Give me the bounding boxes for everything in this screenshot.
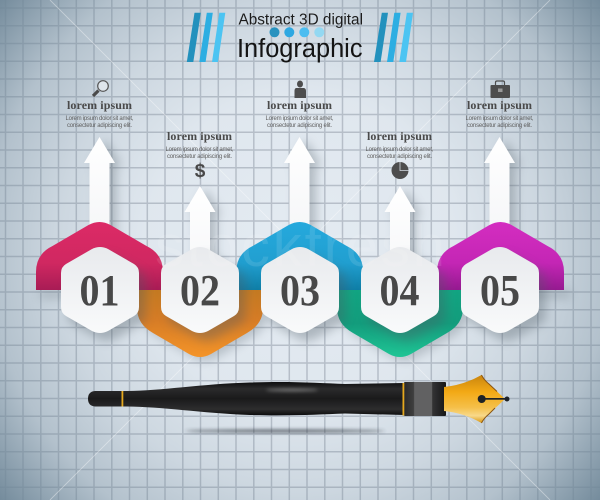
arrow 1 <box>84 137 122 250</box>
column 1 caption: lorem ipsum <box>67 98 132 112</box>
arrow 5 <box>484 137 522 250</box>
arrow 4 <box>384 186 422 299</box>
pen highlight <box>266 389 318 391</box>
nib edge bottom <box>482 408 495 423</box>
left slashes <box>187 13 225 62</box>
hexagon 04: 04 <box>380 266 420 315</box>
hexagon 03 <box>261 247 339 333</box>
title dots <box>270 27 324 37</box>
column 4 caption: consectetur adipiscing elit. <box>367 154 432 160</box>
band shadows <box>40 290 570 361</box>
fountain pen <box>88 375 510 423</box>
pen shadow <box>185 430 385 432</box>
column 5 caption <box>466 81 534 129</box>
nib edge top <box>482 375 497 392</box>
hexagon 05: 05 <box>480 266 520 315</box>
column 2 caption <box>166 129 234 182</box>
pen cap band <box>404 382 446 416</box>
column 3 caption: Lorem ipsum dolor sit amet, <box>266 116 334 122</box>
column 2 caption: Lorem ipsum dolor sit amet, <box>166 147 234 153</box>
icon: pie chart <box>392 162 408 179</box>
nib slit <box>478 395 510 403</box>
column 4 caption: lorem ipsum <box>367 129 432 143</box>
column 2 caption: lorem ipsum <box>167 129 232 143</box>
band 4 green <box>337 290 463 357</box>
column 3 caption: lorem ipsum <box>267 98 332 112</box>
right slashes <box>374 13 413 62</box>
icon: magnifier <box>93 81 108 96</box>
column 3 caption: consectetur adipiscing elit. <box>267 123 332 129</box>
hexagon shadows <box>68 255 546 341</box>
nib <box>444 375 505 423</box>
column 2 caption: consectetur adipiscing elit. <box>167 154 232 160</box>
title line one: Abstract 3D digital <box>238 12 363 28</box>
column 4 caption: Lorem ipsum dolor sit amet, <box>366 147 434 153</box>
icon: dollar: $ <box>195 161 206 182</box>
pen front ring <box>402 383 404 416</box>
column 1 caption: consectetur adipiscing elit. <box>67 123 132 129</box>
column 5 caption: lorem ipsum <box>467 98 532 112</box>
column 3 caption <box>266 80 334 129</box>
column 5 caption: Lorem ipsum dolor sit amet, <box>466 116 534 122</box>
band 1 crimson <box>36 222 163 290</box>
watermark: stockfresh <box>155 214 445 279</box>
icon: briefcase <box>490 81 510 98</box>
arrow 2 <box>184 186 222 299</box>
title block <box>187 12 413 63</box>
hexagon 02: 02 <box>180 266 220 315</box>
column 5 caption: consectetur adipiscing elit. <box>467 123 532 129</box>
hexagon 01: 01 <box>80 266 120 315</box>
hexagon 04 <box>361 247 439 333</box>
band 2 orange <box>137 290 263 357</box>
hexagon 05 <box>461 247 539 333</box>
hexagon 03: 03 <box>280 266 320 315</box>
column 1 caption <box>66 81 134 129</box>
icon: person <box>294 80 306 98</box>
column 1 caption: Lorem ipsum dolor sit amet, <box>66 116 134 122</box>
band 3 blue <box>236 222 363 290</box>
pen body <box>88 382 404 415</box>
title line two: Infographic <box>237 35 363 63</box>
column 4 caption <box>366 129 434 179</box>
pen rear ring <box>122 391 123 406</box>
arrow 3 <box>284 137 322 250</box>
hexagon 01 <box>61 247 139 333</box>
hexagon 02 <box>161 247 239 333</box>
band 5 magenta <box>437 222 564 290</box>
